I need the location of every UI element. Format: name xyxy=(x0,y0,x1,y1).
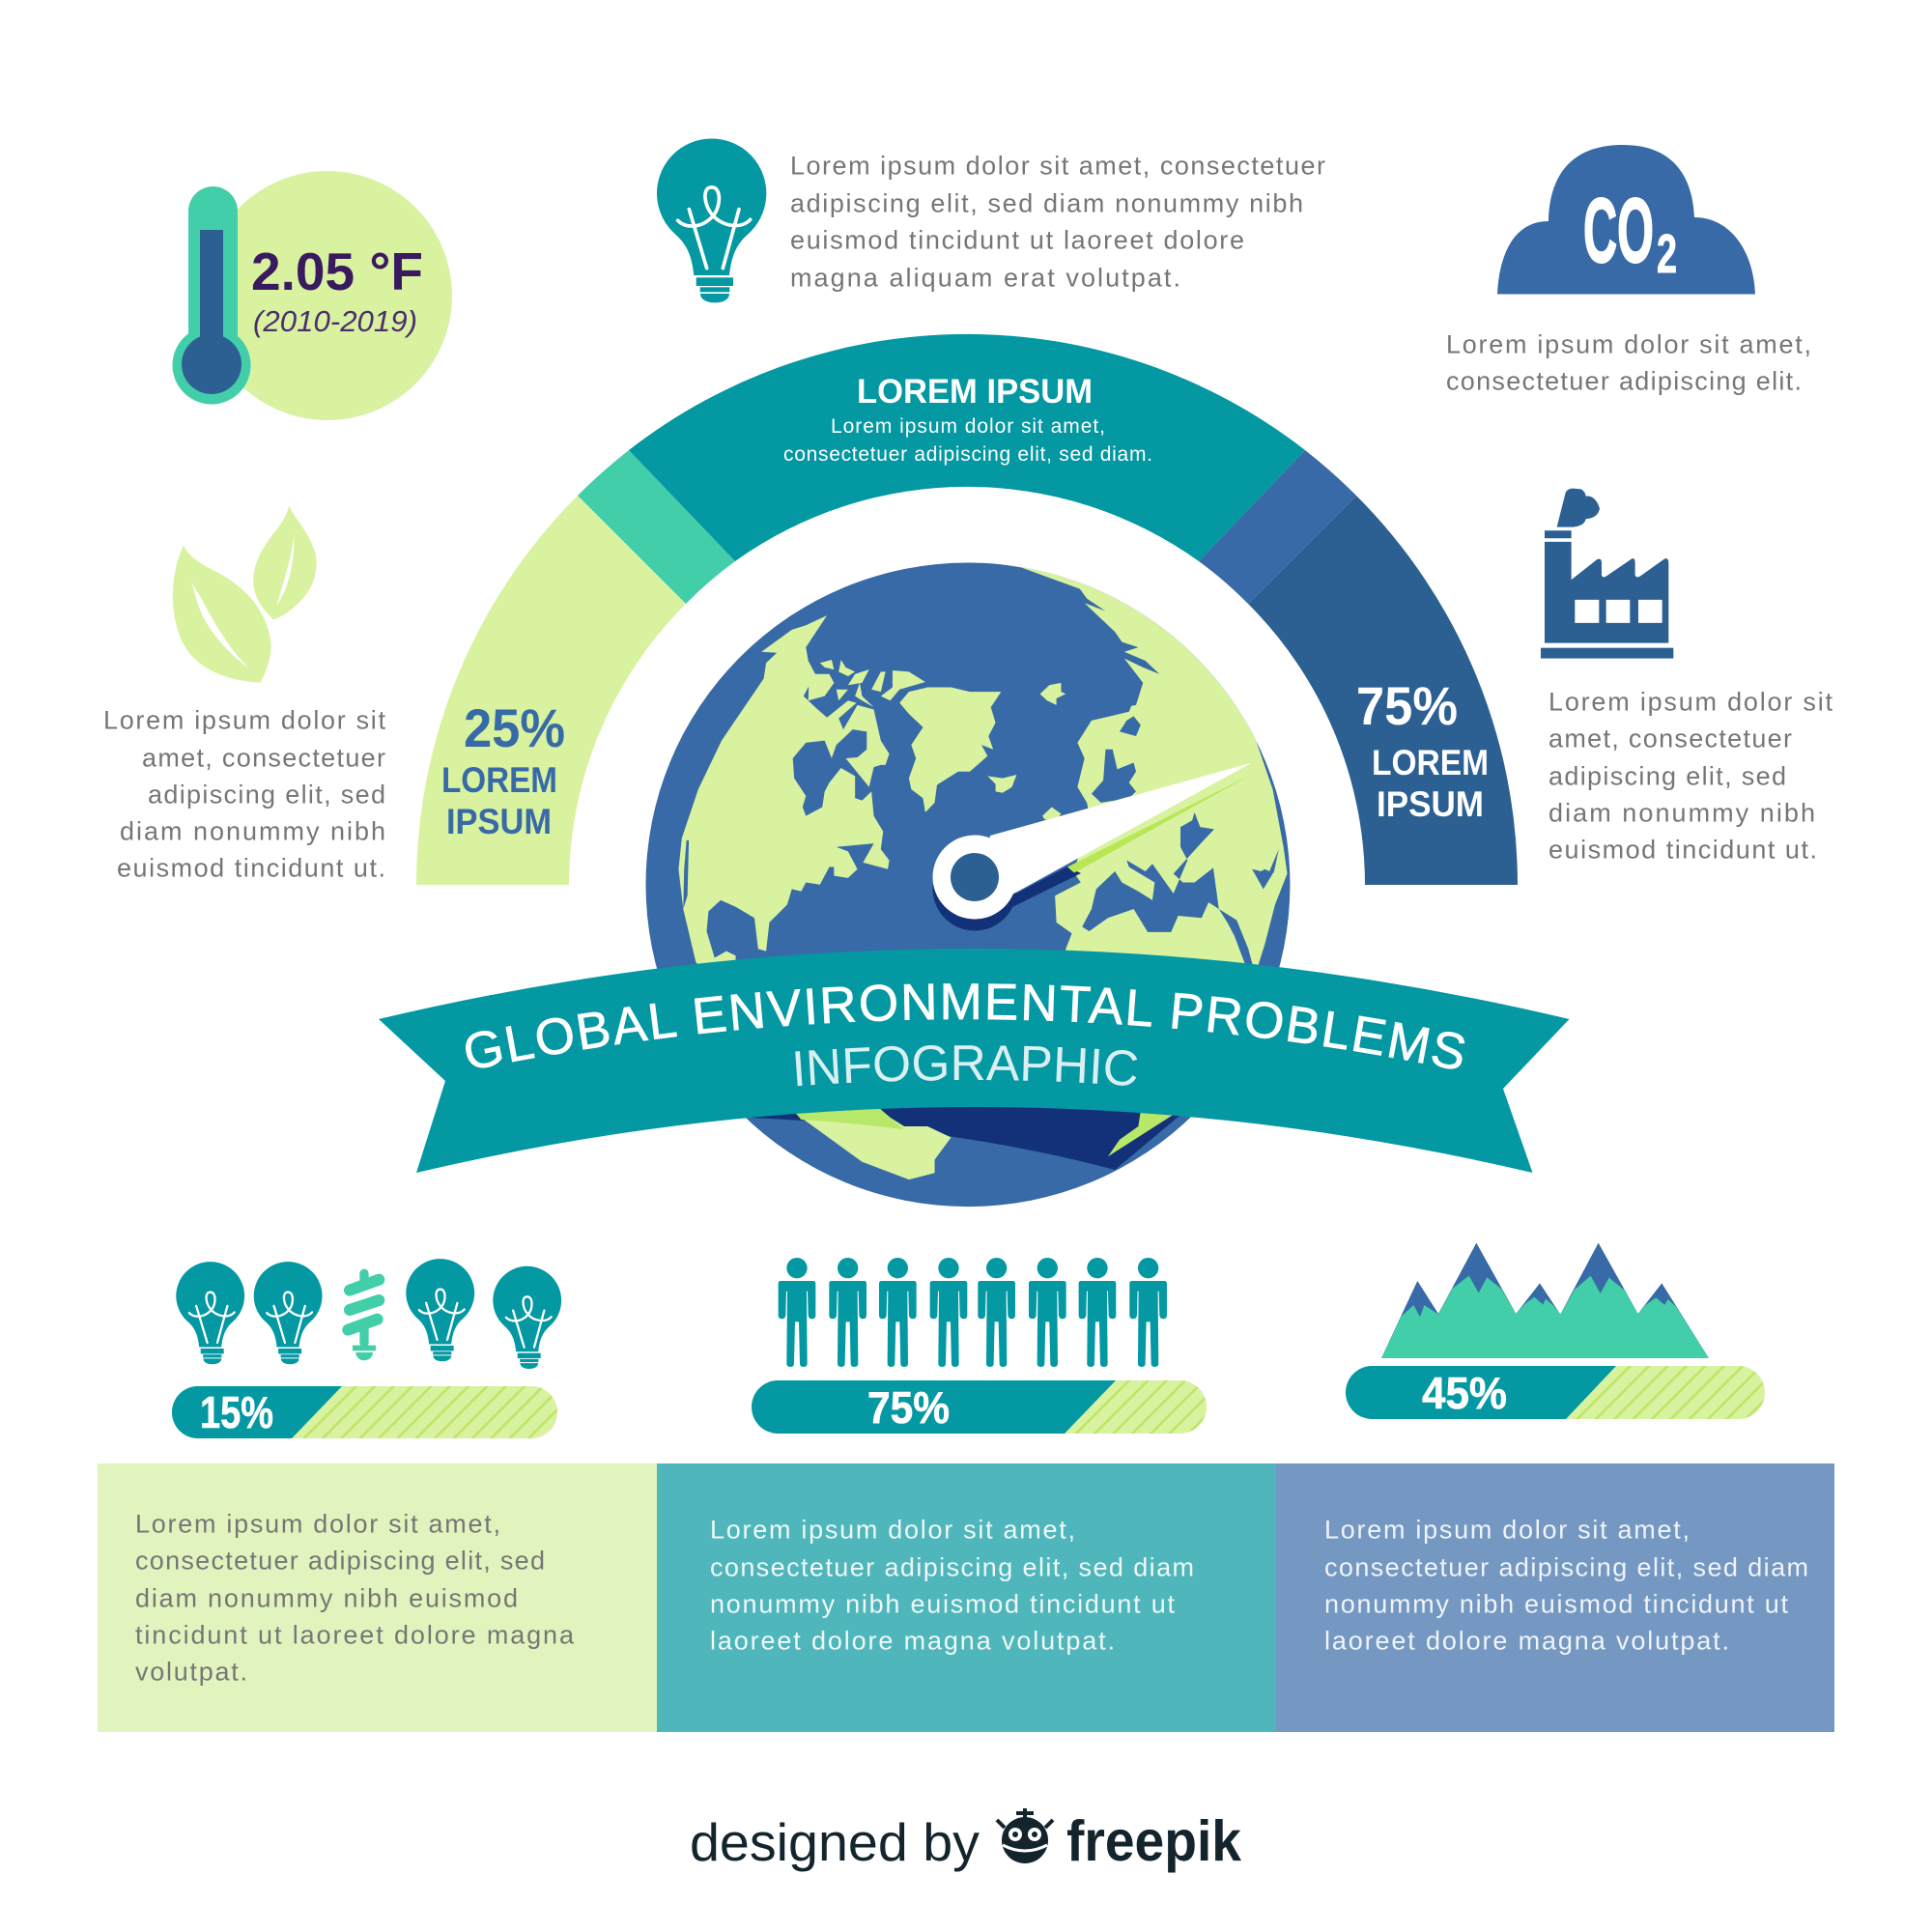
text block: top: adipiscing elit, sed diam nonummy nibh xyxy=(790,189,1303,218)
text block: CO2 xyxy=(1446,330,1811,396)
land: shadowed coast xyxy=(1108,1113,1173,1157)
text block: leaves xyxy=(103,706,385,883)
text block: leaves: Lorem ipsum dolor sit xyxy=(103,706,385,735)
land: Iceland and small islands xyxy=(987,683,1065,820)
land: Eurasia and Africa xyxy=(988,562,1288,971)
gauge label: 25% xyxy=(441,697,565,841)
progress bar 15%: 15% xyxy=(200,1387,273,1437)
temperature circle xyxy=(203,171,452,420)
panel: lime text: volutpat. xyxy=(135,1658,247,1687)
subtitle: INFOGRAPHIC xyxy=(795,1045,1138,1086)
text block: leaves: euismod tincidunt ut. xyxy=(117,854,385,883)
stat: bulbs 15% xyxy=(172,1259,561,1438)
panel: lime text: Lorem ipsum dolor sit amet, xyxy=(135,1510,500,1539)
globe xyxy=(646,562,1290,1207)
panel: teal text xyxy=(657,1463,1276,1732)
gauge segment: blue xyxy=(1199,450,1356,604)
text block: factory: euismod tincidunt ut. xyxy=(1548,836,1817,865)
land: North America xyxy=(678,615,890,971)
credit: designed by freepik xyxy=(690,1808,1241,1873)
icon: thermometer xyxy=(172,186,251,404)
text block: factory: amet, consectetuer xyxy=(1548,724,1792,753)
icon: freepik mascot xyxy=(997,1808,1053,1863)
icon: top light bulb xyxy=(657,138,766,302)
gauge label: 75%: IPSUM xyxy=(1377,784,1484,824)
progress bar 15% xyxy=(172,1386,557,1438)
panel: lime text: tincidunt ut laoreet dolore magna xyxy=(135,1621,575,1650)
stat: people 75% xyxy=(752,1258,1207,1434)
icon: bulb row xyxy=(176,1259,561,1369)
text block: leaves: amet, consectetuer xyxy=(142,744,385,773)
panel: blue text: Lorem ipsum dolor sit amet, xyxy=(1324,1516,1690,1545)
temperature value: 2.05 °F xyxy=(251,242,423,301)
credit: designed by freepik: designed by xyxy=(690,1812,980,1872)
progress bar 75% xyxy=(752,1380,1207,1434)
gauge label: 75% xyxy=(1356,675,1489,824)
icon: CO2 cloud: 2 xyxy=(1657,223,1677,285)
progress bar 45% xyxy=(1346,1366,1765,1419)
land: Arctic islands xyxy=(809,660,925,707)
panel: teal text: Lorem ipsum dolor sit amet, xyxy=(710,1516,1075,1545)
panel: teal text: laoreet dolore magna volutpat. xyxy=(710,1627,1115,1656)
gauge segment: mint xyxy=(578,450,735,604)
text block: leaves: diam nonummy nibh xyxy=(120,817,385,846)
gauge label: top: consectetuer adipiscing elit, sed diam. xyxy=(783,443,1152,466)
title banner xyxy=(379,949,1569,1173)
gauge label: top xyxy=(783,373,1152,466)
text block: factory xyxy=(1548,688,1833,865)
gauge needle xyxy=(933,763,1252,931)
gauge segment: dark blue xyxy=(1248,496,1518,885)
panel: lime text xyxy=(98,1463,657,1732)
text block: factory: adipiscing elit, sed xyxy=(1548,762,1786,791)
gauge segment: teal xyxy=(629,334,1305,561)
text block: top: Lorem ipsum dolor sit amet, consectetuer xyxy=(790,152,1325,181)
gauge label: 75%: 75% xyxy=(1356,675,1458,736)
progress bar 75%: 75% xyxy=(867,1382,950,1433)
text block: factory: Lorem ipsum dolor sit xyxy=(1548,688,1833,717)
stat: mountains 45% xyxy=(1346,1243,1765,1419)
land: Greenland xyxy=(899,688,1001,812)
panel: blue text xyxy=(1276,1463,1834,1732)
icon: factory xyxy=(1541,489,1673,659)
text block: CO2: Lorem ipsum dolor sit amet, xyxy=(1446,330,1811,359)
panel: lime text: consectetuer adipiscing elit, sed xyxy=(135,1547,545,1576)
gauge label: top: LOREM IPSUM xyxy=(857,373,1093,411)
gauge label: 25%: 25% xyxy=(464,697,565,758)
land: South America xyxy=(796,1109,951,1180)
icon: leaves xyxy=(173,505,316,683)
panel: teal text: nonummy nibh euismod tincidunt ut xyxy=(710,1590,1175,1619)
gauge label: 25%: IPSUM xyxy=(446,802,552,841)
seas: Mediterranean, Baltic, inlets xyxy=(1082,717,1279,964)
icon: people row xyxy=(779,1258,1167,1367)
credit: designed by freepik: freepik xyxy=(1066,1809,1241,1873)
text block: CO2: consectetuer adipiscing elit. xyxy=(1446,367,1802,396)
gauge label: 75%: LOREM xyxy=(1372,743,1489,782)
gauge segment: lime xyxy=(416,496,686,885)
panel: blue text: consectetuer adipiscing elit, sed diam xyxy=(1324,1553,1808,1582)
banner shadow on globe xyxy=(752,1107,1179,1170)
gauge label: 25%: LOREM xyxy=(441,760,557,800)
icon: CO2 cloud: CO xyxy=(1583,180,1654,282)
text block: top xyxy=(790,152,1325,293)
gauge arc xyxy=(416,334,1518,885)
icon: CO2 cloud xyxy=(1497,145,1755,294)
temperature period: (2010-2019) xyxy=(253,304,417,338)
panel: blue text: nonummy nibh euismod tincidunt ut xyxy=(1324,1590,1788,1619)
text block: top: euismod tincidunt ut laoreet dolore xyxy=(790,226,1244,255)
text block: factory: diam nonummy nibh xyxy=(1548,799,1815,828)
thermometer stat xyxy=(172,171,452,420)
text block: top: magna aliquam erat volutpat. xyxy=(790,264,1180,293)
progress bar 45%: 45% xyxy=(1422,1368,1507,1418)
panel: blue text: laoreet dolore magna volutpat. xyxy=(1324,1627,1729,1656)
panel: teal text: consectetuer adipiscing elit, sed diam xyxy=(710,1553,1194,1582)
text block: leaves: adipiscing elit, sed xyxy=(148,781,385,810)
title: GLOBAL ENVIRONMENTAL PROBLEMS xyxy=(466,983,1464,1069)
icon: mountains xyxy=(1381,1243,1709,1358)
panel: lime text: diam nonummy nibh euismod xyxy=(135,1584,518,1613)
gauge label: top: Lorem ipsum dolor sit amet, xyxy=(831,415,1105,438)
